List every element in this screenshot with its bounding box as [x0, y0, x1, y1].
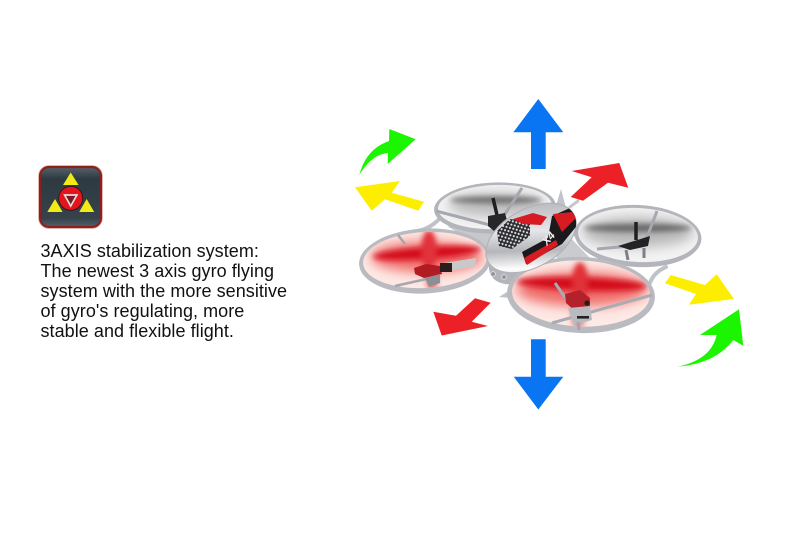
infographic canvas — [38, 99, 744, 410]
arrow: red upper right — [571, 163, 628, 201]
body underside — [489, 255, 545, 284]
arrow: yellow upper left — [355, 181, 424, 211]
arrow: green curved upper left — [359, 129, 416, 175]
arrow: blue down — [514, 339, 563, 410]
hex grille — [497, 219, 530, 249]
drone — [357, 180, 703, 336]
icon: 3-axis gyro badge — [39, 166, 102, 228]
red nose stripes — [513, 213, 547, 225]
arrow: red lower left — [433, 298, 491, 336]
rotor: rear left grey — [433, 180, 557, 236]
drone body shell — [485, 202, 577, 280]
text block: 3AXIS stabilization description: 3AXIS stabilization system: The newest 3 axis gyro flying system with the more sensitive of gyro's regulating, more stable and flexible flight. — [40, 241, 287, 341]
rotor: front left red — [359, 228, 489, 294]
arrow: green curved lower right — [677, 309, 743, 367]
arrow: blue up — [513, 99, 563, 169]
arrow: yellow lower right — [665, 274, 734, 305]
rotor: rear right grey — [574, 204, 702, 268]
rotor: front right red — [506, 254, 656, 336]
drone frame connectors — [418, 189, 666, 298]
body model mark: X4 — [539, 230, 558, 249]
